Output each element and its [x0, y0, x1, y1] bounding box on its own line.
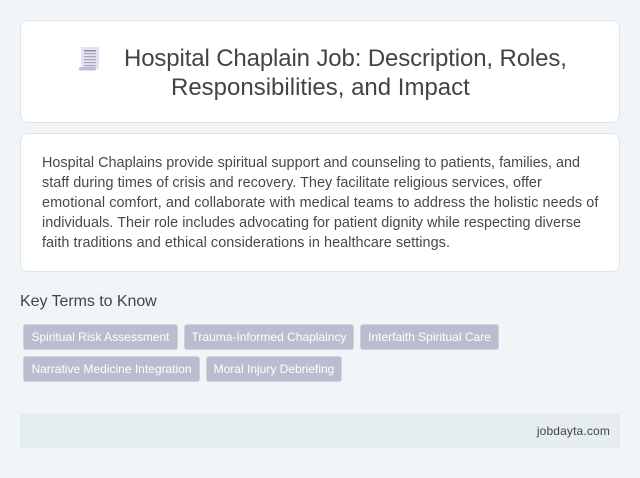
icon: document scroll: [79, 47, 99, 70]
header panel: [20, 20, 620, 123]
description text: Hospital Chaplains provide spiritual support and counseling to patients, families, and: [42, 155, 580, 171]
tag: [23, 324, 178, 350]
tag: Trauma-Informed Chaplaincy: [192, 330, 346, 344]
tag: [360, 324, 499, 350]
tag: Moral Injury Debriefing: [214, 362, 334, 376]
tag: Spiritual Risk Assessment: [31, 330, 170, 344]
tag: [206, 356, 342, 382]
tag: [184, 324, 354, 350]
description text: emotional comfort, and collaborate with medical teams to address the holistic needs of: [42, 195, 598, 211]
description text: faith traditions and ethical considerations in healthcare settings.: [42, 235, 450, 251]
footer bar: [20, 414, 620, 448]
tag: [23, 356, 200, 382]
tag: Narrative Medicine Integration: [31, 362, 192, 376]
description text: individuals. Their role includes advocating for patient dignity while respecting diverse: [42, 215, 581, 231]
footer source text: jobdayta.com: [537, 424, 610, 438]
tag: Interfaith Spiritual Care: [368, 330, 491, 344]
description text: staff during times of crisis and recovery. They facilitate religious services, offer: [42, 175, 542, 191]
description panel: [20, 133, 620, 272]
heading: key terms: Key Terms to Know: [20, 293, 157, 310]
title: [124, 45, 567, 101]
title: Responsibilities, and Impact: [171, 74, 470, 101]
title: Hospital Chaplain Job: Description, Roles,: [124, 45, 567, 72]
key term tags: [23, 324, 499, 382]
description text: [42, 155, 598, 251]
